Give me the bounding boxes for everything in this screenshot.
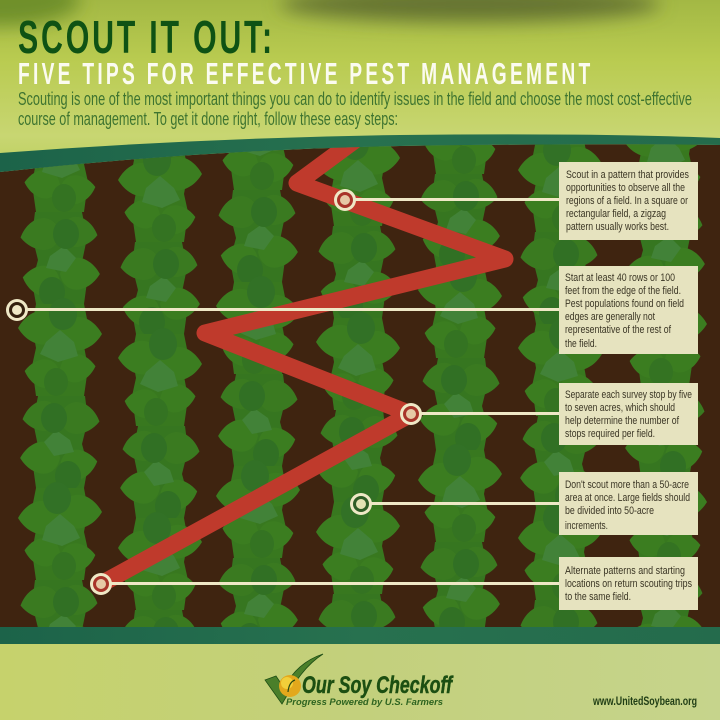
tip box 2: Pest populations found on field [565, 298, 684, 310]
icon: soybean [279, 675, 301, 697]
top green band [0, 134, 720, 172]
tip box 2: feet from the edge of the field. [565, 285, 681, 297]
tip box 1: rectangular field, a zigzag [566, 208, 666, 220]
tip box 2: representative of the rest of [565, 324, 672, 336]
tip box 4: be divided into 50-acre [565, 505, 654, 517]
soybean field [0, 144, 720, 627]
tip box 4 [559, 472, 698, 535]
tip box 2: Start at least 40 rows or 100 [565, 272, 675, 284]
tip 3 connector and marker [400, 403, 561, 425]
tip box 1: regions of a field. In a square or [566, 195, 688, 207]
zigzag scouting path [101, 138, 505, 584]
bottom green band [0, 627, 720, 644]
logo: Our Soy Checkoff [265, 654, 453, 708]
icon: check mark [265, 654, 323, 704]
tip box 2 [559, 266, 698, 354]
tip box 5 [559, 557, 698, 610]
tip 1 connector and marker [334, 189, 561, 211]
tip 2 connector and marker [6, 299, 561, 321]
tip box 2: edges are generally not [565, 311, 655, 323]
subtitle: FIVE TIPS FOR EFFECTIVE PEST MANAGEMENT [18, 58, 590, 91]
tip box 4: area at once. Large fields should [565, 492, 690, 504]
tip 5 connector and marker [90, 573, 561, 595]
intro text [18, 88, 692, 129]
tip box 5: to the same field. [565, 591, 631, 603]
tip 4 connector and marker [350, 493, 561, 515]
tip box 1 [559, 162, 698, 240]
tip box 5: Alternate patterns and starting [565, 565, 685, 577]
footer background [0, 640, 720, 720]
title: SCOUT IT OUT: [18, 13, 272, 64]
tip box 3: to seven acres, which should [565, 402, 675, 414]
tip box 1: opportunities to observe all the [566, 182, 685, 194]
tip box 3 [559, 383, 698, 445]
logo tagline: Progress Powered by U.S. Farmers [286, 697, 443, 708]
tip box 1: Scout in a pattern that provides [566, 169, 689, 181]
tip box 3: help determine the number of [565, 415, 680, 427]
tip box 4: Don't scout more than a 50-acre [565, 479, 689, 491]
logo wordmark: Our Soy Checkoff [302, 672, 453, 699]
tip box 4: increments. [565, 520, 608, 532]
tip box 3: stops required per field. [565, 428, 655, 440]
tip box 5: locations on return scouting trips [565, 578, 692, 590]
intro text: course of management. To get it done right, follow these easy steps: [18, 108, 398, 129]
header background [0, 0, 720, 170]
tip box 1: pattern usually works best. [566, 221, 669, 233]
tip box 2: the field. [565, 338, 597, 350]
